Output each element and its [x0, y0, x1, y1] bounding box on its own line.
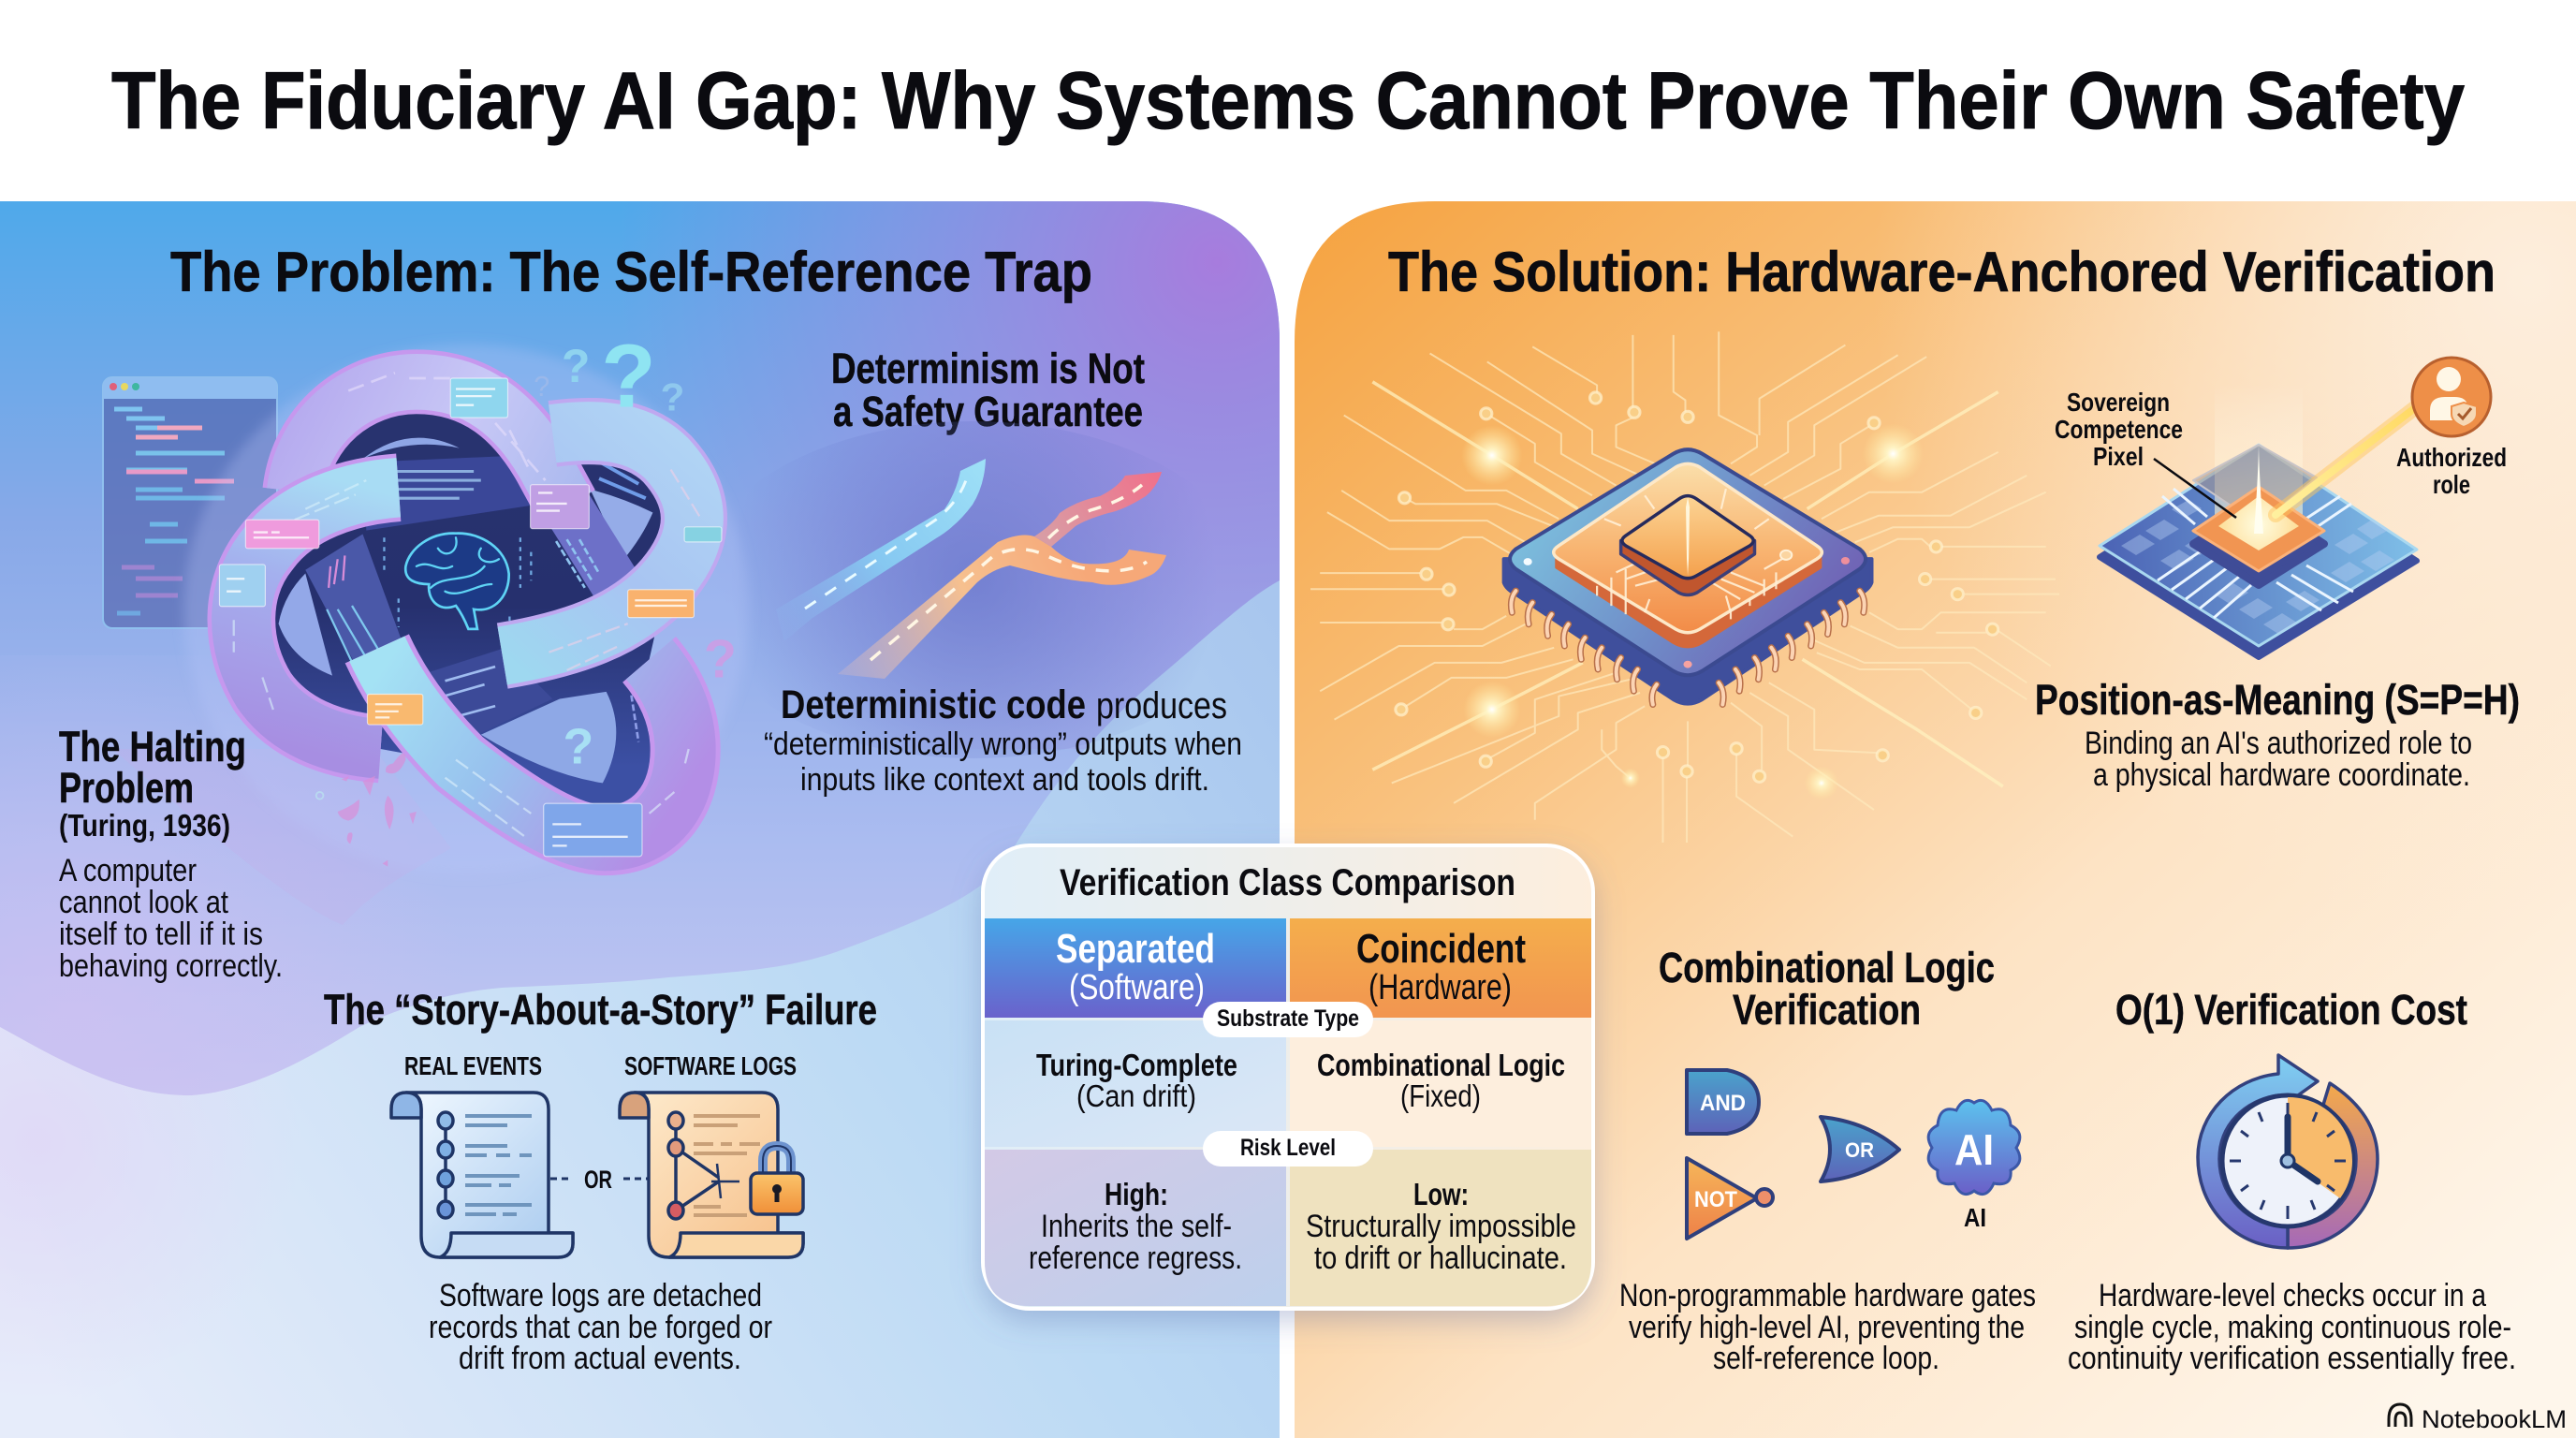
pill: substrate type — [1203, 1002, 1373, 1037]
text: o(1) caption: Hardware-level checks occur in a — [2099, 1278, 2486, 1313]
icon: main processor chip — [1504, 449, 1871, 704]
band: left loop — [234, 480, 399, 749]
band: lower sweep — [377, 649, 689, 841]
row: substrate type, software: Turing-Complete — [1036, 1048, 1237, 1082]
gate: and — [1687, 1070, 1759, 1134]
heading: story-about-a-story: The “Story-About-a-Story” Failure — [324, 986, 877, 1034]
question marks: ? — [563, 719, 593, 774]
text: software logs caption: records that can be forged or — [429, 1310, 772, 1345]
logo: notebooklm: NotebookLM — [2422, 1405, 2567, 1433]
row: risk level, software — [985, 1150, 1286, 1306]
heading: combinational logic verification: Verification — [1733, 986, 1921, 1034]
icon: code window — [103, 377, 277, 628]
panel: the solution — [1295, 201, 2576, 1438]
question marks: ? — [534, 371, 549, 403]
heading: determinism: Determinism is Not — [831, 345, 1145, 392]
heading: determinism: a Safety Guarantee — [833, 388, 1143, 435]
text: deterministic code: produces — [1096, 685, 1227, 726]
question marks: ? — [562, 340, 590, 392]
text: deterministic code — [764, 682, 1242, 798]
gate: or — [1821, 1117, 1899, 1181]
label: authorized role: role — [2433, 470, 2470, 499]
text: position as meaning: a physical hardware coordinate. — [2093, 757, 2470, 793]
header: separated: (Software) — [1069, 968, 1205, 1007]
heading: combinational logic verification — [1659, 944, 1995, 1034]
heading: combinational logic verification: Combinational Logic — [1659, 944, 1995, 991]
floating note cards — [219, 378, 722, 857]
label: authorized role — [2396, 443, 2507, 499]
header: coincident: (Hardware) — [1368, 968, 1512, 1007]
header: separated: Separated — [1056, 926, 1215, 972]
text: combinational logic caption: Non-programmable hardware gates — [1619, 1278, 2036, 1313]
icon: circuit traces — [1310, 331, 2059, 843]
text: halting problem — [59, 723, 283, 984]
label: sovereign competence pixel — [2055, 388, 2183, 471]
connector: or: OR — [584, 1166, 612, 1194]
row: substrate type, software — [985, 1020, 1286, 1147]
label: sovereign competence pixel: Sovereign — [2067, 388, 2170, 417]
icon: ai brain: AI — [1954, 1125, 1994, 1174]
pill: risk level: Risk Level — [1240, 1135, 1336, 1161]
header: separated — [985, 918, 1286, 1018]
pill: risk level — [1203, 1131, 1373, 1167]
row: risk level, hardware: Structurally impossible — [1306, 1209, 1576, 1244]
text: position as meaning: Binding an AI's authorized role to — [2085, 726, 2472, 761]
gate: or: OR — [1845, 1138, 1874, 1162]
glow behind knot — [183, 345, 750, 874]
illustration: hardware pixel board — [2100, 384, 2424, 657]
heading: determinism — [831, 345, 1145, 435]
pill: substrate type: Substrate Type — [1217, 1005, 1359, 1032]
band: top arc — [295, 373, 567, 506]
text: combinational logic caption: verify high-level AI, preventing the — [1629, 1310, 2025, 1345]
row: risk level, software: reference regress. — [1029, 1240, 1242, 1276]
text: deterministic code: Deterministic code — [781, 682, 1086, 727]
question marks: ? — [661, 374, 684, 418]
icon: logic gates — [1687, 1070, 1899, 1239]
text: combinational logic caption — [1619, 1278, 2036, 1376]
icon: real events scroll — [391, 1093, 573, 1257]
panel heading: the problem: The Problem: The Self-Reference Trap — [170, 241, 1092, 303]
row: risk level, hardware: Low: — [1413, 1177, 1469, 1211]
icon: software logs scroll with lock — [620, 1093, 803, 1257]
header: coincident — [1290, 918, 1591, 1018]
label: software logs: SOFTWARE LOGS — [624, 1051, 797, 1080]
icon: authorized role badge — [2412, 358, 2491, 436]
row: risk level, hardware — [1290, 1150, 1591, 1306]
question marks: ? — [704, 630, 737, 690]
text: deterministic code: “deterministically wrong” outputs when — [764, 726, 1242, 762]
band: right loop — [503, 432, 699, 670]
row: substrate type, hardware: Combinational Logic — [1317, 1048, 1565, 1082]
row: risk level, hardware: to drift or hallucinate. — [1314, 1240, 1567, 1276]
header: coincident: Coincident — [1356, 926, 1526, 972]
knot interior — [242, 382, 694, 841]
text: software logs caption: Software logs are detached — [439, 1278, 762, 1313]
icon: single-cycle clock — [2198, 1055, 2378, 1248]
illustration: self-reference knot — [183, 327, 750, 874]
text: halting problem: The Halting — [59, 723, 246, 770]
table title: Verification Class Comparison — [1060, 862, 1515, 903]
gate: not — [1687, 1158, 1773, 1239]
panel: verification class comparison table — [983, 845, 1593, 1320]
text: software logs caption — [429, 1278, 772, 1376]
illustration: diverging roads — [693, 421, 1254, 758]
label: real events: REAL EVENTS — [404, 1051, 542, 1080]
text: halting problem: cannot look at — [59, 885, 228, 920]
icon: brain — [405, 534, 509, 629]
gate: and: AND — [1700, 1091, 1746, 1116]
text: halting problem: Problem — [59, 764, 194, 812]
label: sovereign competence pixel: Competence — [2055, 415, 2183, 444]
label: ai: AI — [1964, 1203, 1986, 1232]
text: software logs caption: drift from actual events. — [459, 1341, 741, 1376]
text: position as meaning — [2035, 676, 2520, 793]
text: halting problem: behaving correctly. — [59, 948, 283, 984]
icon: ai brain — [1928, 1100, 2020, 1195]
question marks: ? — [601, 327, 656, 427]
label: authorized role: Authorized — [2396, 443, 2507, 472]
text: o(1) caption — [2068, 1278, 2516, 1376]
fragments breaking off — [338, 754, 417, 867]
gate: not: NOT — [1694, 1187, 1737, 1212]
connector: or — [550, 1166, 648, 1194]
beam to authorized role — [2276, 401, 2424, 515]
callout line — [2154, 459, 2236, 518]
text: halting problem: (Turing, 1936) — [59, 808, 230, 843]
row: substrate type, hardware: (Fixed) — [1400, 1078, 1481, 1113]
text: combinational logic caption: self-reference loop. — [1713, 1341, 1939, 1376]
row: risk level, software: High: — [1105, 1177, 1168, 1211]
panel: the problem — [0, 201, 1280, 1438]
text: deterministic code: inputs like context and tools drift. — [800, 762, 1209, 798]
label: sovereign competence pixel: Pixel — [2093, 442, 2144, 471]
heading: o(1) verification cost: O(1) Verification Cost — [2115, 986, 2467, 1034]
row: substrate type, software: (Can drift) — [1076, 1078, 1196, 1113]
icon: padlock — [751, 1146, 803, 1214]
text: halting problem: itself to tell if it is — [59, 917, 263, 952]
question marks — [534, 327, 737, 774]
row: risk level, software: Inherits the self- — [1041, 1209, 1232, 1244]
text: halting problem: A computer — [59, 853, 197, 888]
row: substrate type, hardware — [1290, 1020, 1591, 1147]
